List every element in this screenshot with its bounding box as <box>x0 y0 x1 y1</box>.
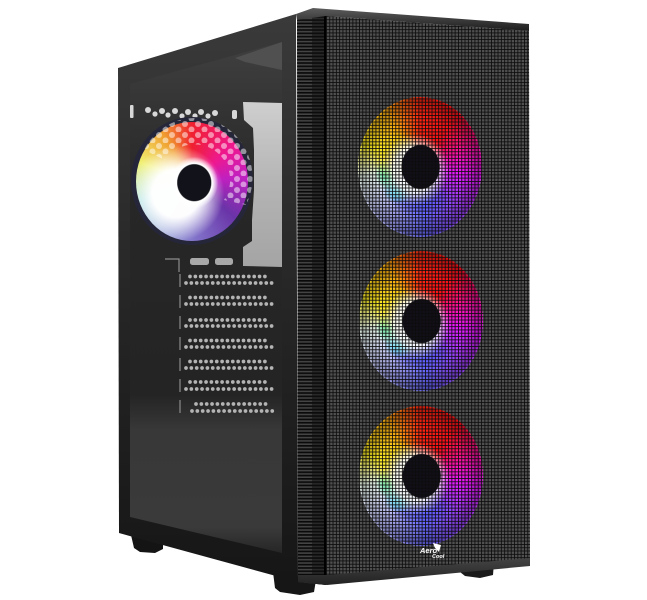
front mesh <box>326 16 530 577</box>
bottom front rgb fan <box>359 406 483 546</box>
bottom trim <box>298 558 530 585</box>
aerocool logo: Aero <box>419 546 438 555</box>
side panel frame <box>118 14 298 582</box>
inner fan surround <box>131 117 253 245</box>
top trim <box>296 8 529 31</box>
cable holes <box>186 276 274 411</box>
front left foot <box>273 572 316 595</box>
silver back plate <box>243 102 282 267</box>
inner fan honeycomb grille <box>144 118 252 205</box>
top front rgb fan <box>358 97 482 237</box>
side glass <box>130 42 282 553</box>
top vent dots <box>130 105 237 119</box>
front chamfer <box>297 14 326 585</box>
front face <box>326 16 530 577</box>
chamfer mesh <box>297 14 326 585</box>
front right foot <box>455 562 494 578</box>
aerocool logo <box>419 543 445 560</box>
inner rgb fan <box>136 122 248 241</box>
middle front rgb fan <box>359 251 483 391</box>
motherboard tray edge <box>165 259 180 416</box>
corner pillar <box>312 16 326 582</box>
slot covers <box>190 258 233 265</box>
glass reflection top <box>235 42 282 70</box>
rear left foot <box>131 535 163 553</box>
aerocool logo: Cool <box>432 554 445 560</box>
